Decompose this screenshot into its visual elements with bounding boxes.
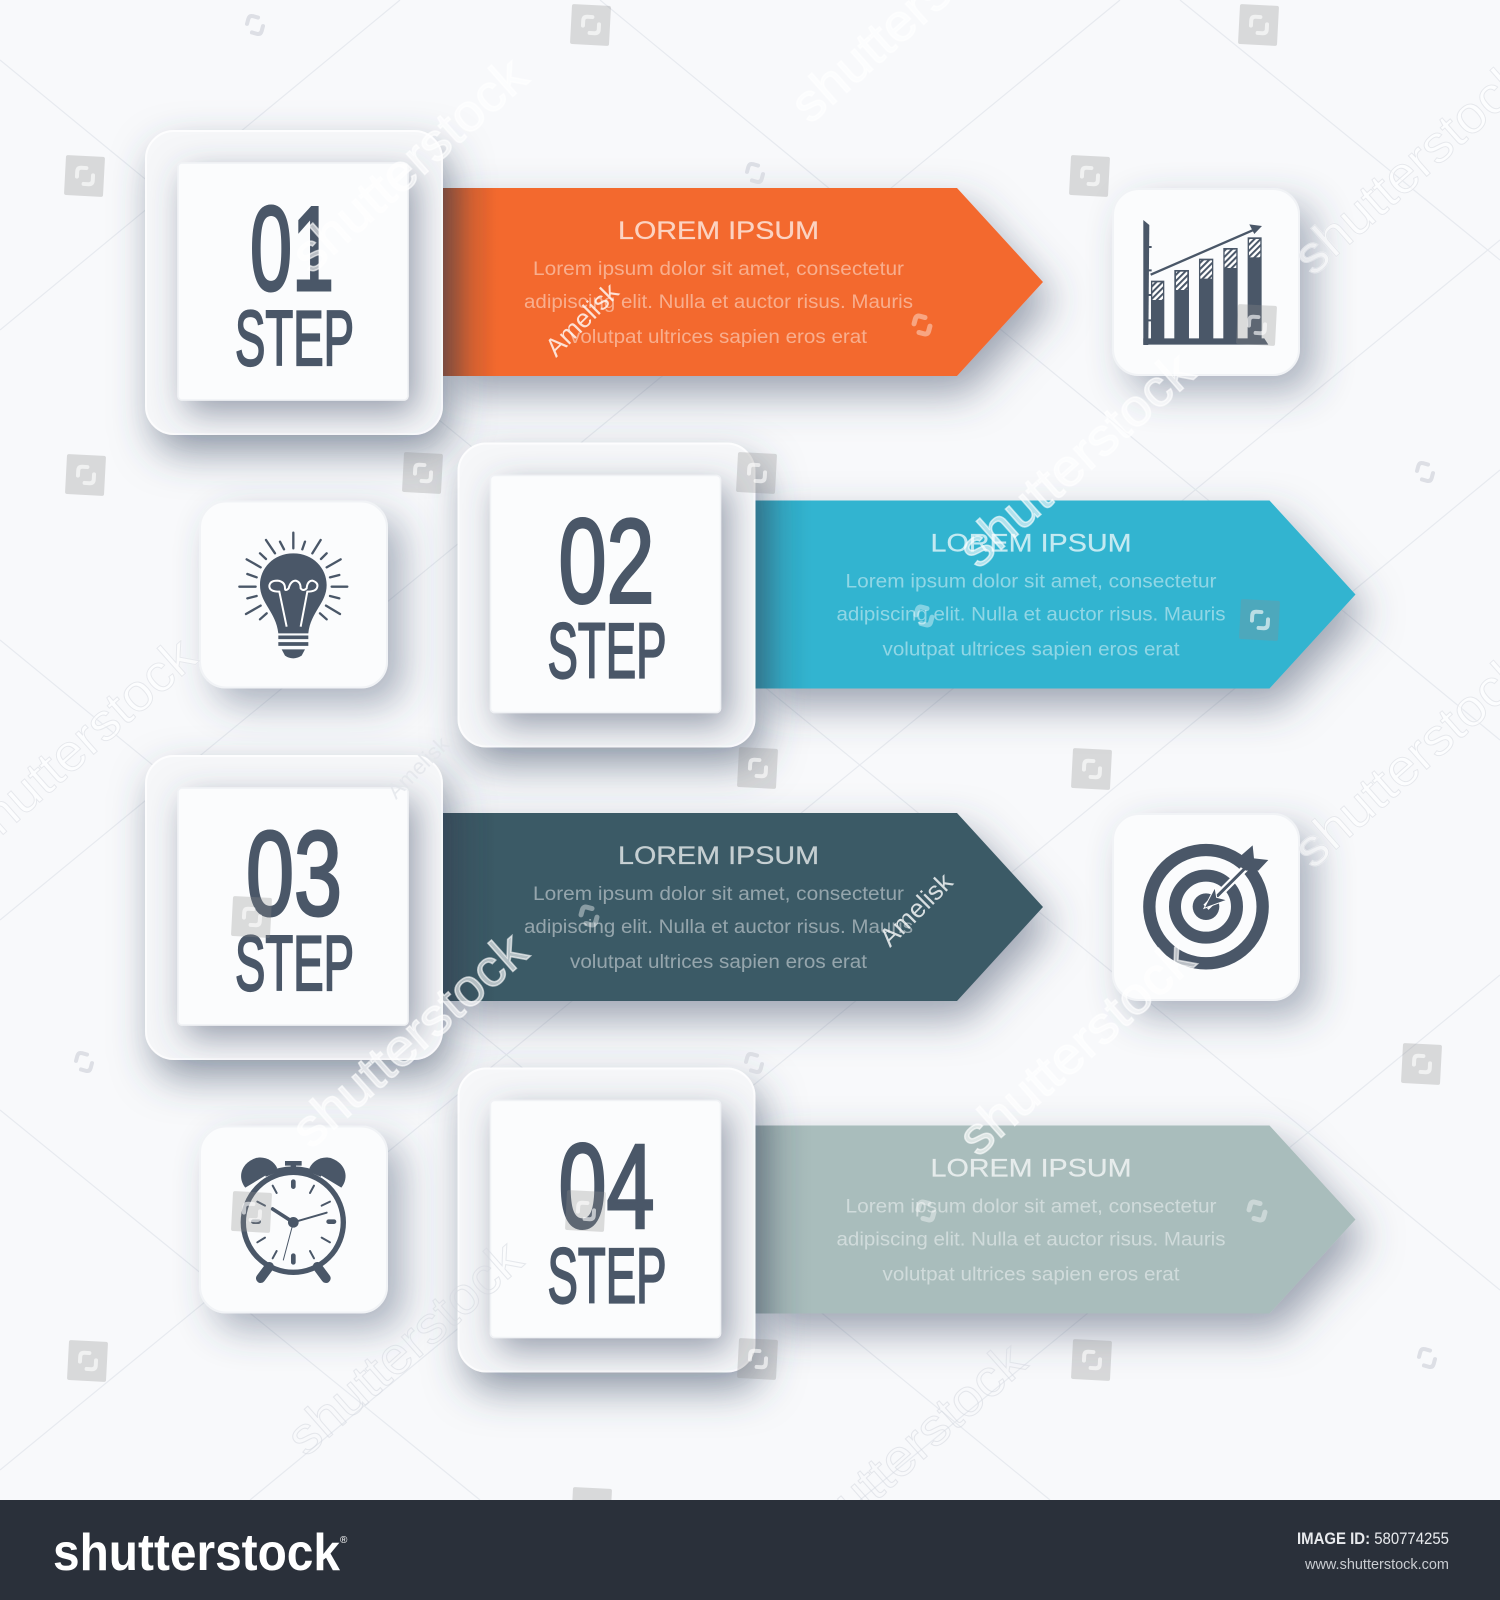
icon card: bar chart (1113, 189, 1299, 375)
step 3 panel: 03 (246, 807, 342, 941)
watermarks: Amelisk (873, 866, 959, 952)
footer url: www.shutterstock.com (1304, 1556, 1449, 1573)
watermarks: shutterstock (780, 1331, 1038, 1569)
footer bar (0, 1500, 1500, 1600)
icon: alarm clock (241, 1158, 346, 1278)
step 1 panel: STEP (235, 294, 354, 382)
watermarks: Amelisk (539, 276, 625, 362)
arrow 2: blue (756, 500, 1356, 688)
step 4 panel (458, 1068, 754, 1372)
arrow 3: dark teal: volutpat ultrices sapien eros erat (570, 952, 868, 973)
arrow 1: orange: LOREM IPSUM (618, 217, 819, 245)
arrow 4: sage: volutpat ultrices sapien eros erat (882, 1264, 1180, 1286)
step 3 panel: STEP (235, 919, 354, 1007)
step 3 panel (146, 756, 442, 1059)
watermarks: shutterstock (281, 921, 539, 1159)
icon card: alarm clock (200, 1126, 387, 1312)
arrow 1: orange: volutpat ultrices sapien eros erat (570, 327, 868, 348)
arrow 3: dark teal (443, 813, 1043, 1001)
arrow 1: orange: adipiscing elit. Nulla et auctor risus. Mauris (524, 292, 913, 313)
arrow 2: blue: Lorem ipsum dolor sit amet, consectetur (846, 572, 1217, 592)
icon: light bulb (239, 533, 347, 658)
watermarks: Amelisk (382, 731, 455, 804)
arrow 4: sage: LOREM IPSUM (930, 1154, 1132, 1182)
arrow 4: sage: Lorem ipsum dolor sit amet, consectetur (846, 1196, 1217, 1218)
arrow 1: orange (443, 188, 1043, 376)
watermarks: shutterstock (281, 46, 539, 284)
registered mark: ® (340, 1535, 348, 1546)
step 1 panel: 01 (250, 182, 334, 316)
watermarks: shutterstock (948, 341, 1206, 579)
row 3 (146, 756, 1299, 1059)
watermarks: shutterstock (276, 1229, 534, 1467)
arrow 3: dark teal: LOREM IPSUM (618, 842, 819, 870)
arrow 3: dark teal: Lorem ipsum dolor sit amet, consectetur (533, 884, 905, 905)
row 2 (200, 444, 1356, 746)
watermarks: shutterstock (948, 929, 1206, 1167)
arrow 1: orange: Lorem ipsum dolor sit amet, consectetur (533, 259, 905, 280)
arrow 2: blue: LOREM IPSUM (930, 530, 1132, 558)
step 1 panel (146, 131, 442, 434)
step 2 panel: 02 (558, 494, 654, 628)
icon card: target (1113, 814, 1299, 1000)
row 1 (146, 131, 1299, 434)
row 4 (200, 1068, 1356, 1372)
step 4 panel: 04 (558, 1120, 654, 1254)
step 2 panel (458, 444, 754, 746)
icon: bar chart (1143, 220, 1268, 345)
arrow 4: sage (756, 1126, 1356, 1314)
arrow 4: sage: adipiscing elit. Nulla et auctor risus. Mauris (836, 1230, 1226, 1250)
arrow 2: blue: volutpat ultrices sapien eros erat (882, 640, 1180, 660)
footer logo: shutterstock (53, 1524, 340, 1582)
step 2 panel: STEP (548, 606, 666, 694)
image id: IMAGE ID: 580774255 (1297, 1530, 1449, 1548)
step 4 panel: STEP (548, 1232, 666, 1320)
icon card: light bulb (200, 502, 387, 688)
arrow 3: dark teal: adipiscing elit. Nulla et auctor risus. Mauris (524, 917, 913, 938)
arrow 2: blue: adipiscing elit. Nulla et auctor risus. Mauris (836, 604, 1226, 626)
icon: target (1149, 845, 1268, 963)
